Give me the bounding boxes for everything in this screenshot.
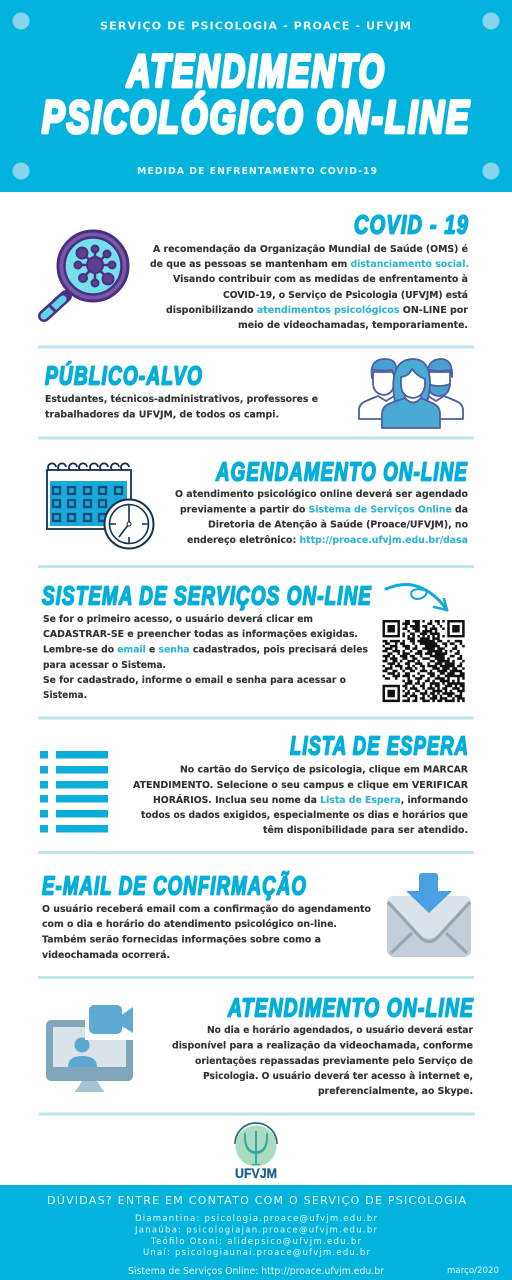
text block: lista de espera [133,764,468,836]
text block: atendimento: preferencialmente, ao Skype. [318,1086,473,1097]
main title: ATENDIMENTO [126,46,386,96]
text block: público-alvo [45,393,318,420]
text block: atendimento [172,1024,473,1097]
main title [42,46,471,142]
divider lines [38,346,475,1116]
icon: list [40,751,108,832]
logo: UFVJM: UFVJM [235,1165,277,1181]
text block: sistema: para acessar o Sistema. [43,660,166,671]
text block: sistema: Lembre-se do email e senha cadastrados, pois precisará deles [43,644,368,656]
text block: lista de espera: No cartão do Serviço de psicologia, clique em MARCAR [180,764,468,776]
text block: sistema [43,613,368,701]
text block: covid-19: meio de videochamadas, temporariamente. [238,320,468,331]
text block: covid-19: Visando contribuir com as medidas de enfrentamento à [173,273,468,285]
header subtitle: MEDIDA DE ENFRENTAMENTO COVID-19 [137,166,378,177]
heading: sistema de serviços: SISTEMA DE SERVIÇOS ON-LINE [42,582,372,610]
text block: agendamento [175,488,468,546]
panel: atendimento on-line [46,994,474,1097]
QR code [382,620,465,702]
panel: covid-19 [44,212,469,331]
contact emails: Diamantina: psicologia.proace@ufvjm.edu.br [135,1214,378,1224]
text block: atendimento: No dia e horário agendados, o usuário deverá estar [207,1024,473,1036]
header organisation line: SERVIÇO DE PSICOLOGIA - PROACE - UFVJM [100,20,412,32]
icon: calendar with clock [47,463,154,548]
icon: envelope with arrow [387,873,471,957]
heading: covid-19: COVID - 19 [354,212,469,240]
panel: sistema de serviços on-line [42,582,465,702]
text block: sistema: Se for o primeiro acesso, o usuário deverá clicar em [43,613,313,625]
text block: agendamento: endereço eletrônico: http://proace.ufvjm.edu.br/dasa [187,534,468,546]
text block: covid-19 [150,243,469,331]
text block: sistema: Se for cadastrado, informe o email e senha para acessar o [43,675,346,686]
text block: agendamento: previamente a partir do Sistema de Serviços Online da [180,504,468,516]
arrow to QR code [386,584,447,610]
text block: lista de espera: HORÁRIOS. Inclua seu nome da Lista de Espera, informando [153,793,468,806]
text block: covid-19: COVID-19, o Serviço de Psicologia (UFVJM) está [223,289,468,301]
text block: e-mail: O usuário receberá email com a confirmação do agendamento [42,903,371,915]
contact emails: Unaí: psicologiaunai.proace@ufvjm.edu.br [143,1248,370,1258]
text block: lista de espera: têm disponibilidade para ser atendido. [263,824,468,836]
text block: covid-19: disponibilizando atendimentos psicológicos ON-LINE por [166,304,468,316]
text block: agendamento: O atendimento psicológico online deverá ser agendado [175,488,468,500]
text block: público-alvo: trabalhadores da UFVJM, de todos os campi. [45,410,279,420]
text block: lista de espera: ATENDIMENTO. Selecione o seu campus e clique em VERIFICAR [133,780,468,791]
text block: atendimento: orientações repassadas previamente pelo Serviço de [195,1056,473,1067]
icon: three people [359,359,463,428]
contact emails: Teófilo Otoni: alidepsico@ufvjm.edu.br [150,1236,362,1247]
text block: e-mail: videochamada ocorrerá. [42,949,170,961]
text block: sistema: Sistema. [43,690,87,701]
icon: magnifier with virus [44,231,128,316]
text block: covid-19: de que as pessoas se mantenham em distanciamento social. [150,259,469,270]
text block: e-mail [42,903,371,961]
text block: lista de espera: todos os dados exigidos, especialmente os dias e horários que [141,809,468,821]
panel: agendamento on-line [47,458,468,548]
date: março/2020 [447,1266,499,1276]
text block: covid-19: A recomendação da Organização Mundial de Saúde (OMS) é [153,243,468,255]
header banner [0,0,512,192]
contact emails [134,1214,378,1258]
text block: e-mail: Também serão fornecidas informações sobre como a [42,934,321,946]
text block: atendimento: Psicologia. O usuário deverá ter acesso à internet e, [203,1070,473,1082]
panel: público-alvo [45,359,463,428]
logo: UFVJM [235,1123,277,1181]
text block: agendamento: Diretoria de Atenção à Saúde (Proace/UFVJM), no [208,518,468,530]
text block: público-alvo: Estudantes, técnicos-administrativos, professores e [45,393,318,405]
footer heading: DÚVIDAS? ENTRE EM CONTATO COM O SERVIÇO DE PSICOLOGIA [47,1194,466,1207]
panel: e-mail de confirmação [42,870,471,961]
panel: lista de espera [40,732,469,836]
text block: sistema: CADASTRAR-SE e preencher todas as informações exigidas. [43,629,358,640]
text block: atendimento: disponível para a realização da videochamada, conforme [172,1040,473,1052]
text block: e-mail: com o dia e horário do atendimento psicológico on-line. [42,918,337,930]
footer [0,1185,512,1280]
heading: público-alvo: PÚBLICO-ALVO [45,362,203,390]
icon: video call monitor [46,1001,133,1092]
heading: e-mail: E-MAIL DE CONFIRMAÇÃO [42,870,307,900]
system link: Sistema de Serviços Online: http://proace.ufvjm.edu.br [128,1266,384,1277]
contact emails: Janaúba: psicologiajan.proace@ufvjm.edu.br [134,1226,378,1236]
